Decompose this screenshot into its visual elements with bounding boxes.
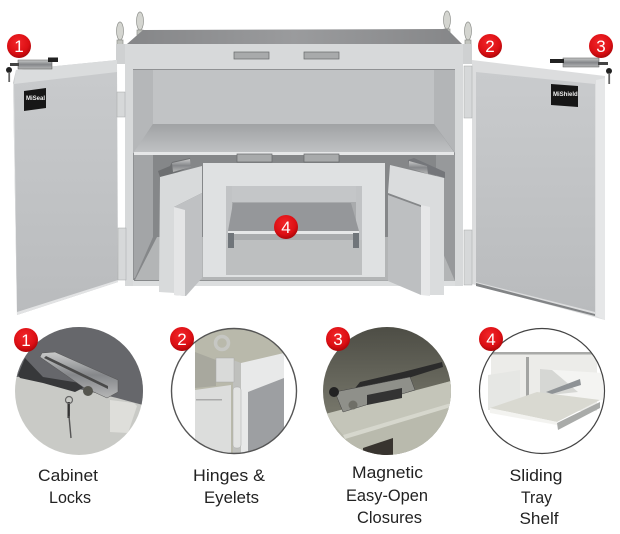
- badge 2 on cabinet: 2: [485, 37, 495, 56]
- door label: [24, 88, 46, 111]
- label: Cabinet Locks: Locks: [49, 488, 91, 507]
- door hinges: [117, 92, 126, 280]
- inner left door: [158, 158, 202, 296]
- label: Hinges & Eyelets: Eyelets: [204, 488, 259, 507]
- middle shelf: [134, 124, 454, 156]
- icon: right door lock: [550, 58, 612, 84]
- label: Magnetic Easy-Open Closures: [346, 463, 428, 527]
- badge 2: 2: [177, 330, 187, 349]
- badge 4 on cabinet: [274, 215, 298, 239]
- inner right door: [388, 158, 445, 296]
- sliding tray: [228, 203, 359, 248]
- label: Cabinet Locks: [38, 466, 98, 507]
- badge 4: [479, 327, 503, 351]
- panel: cabinet locks: [14, 327, 143, 507]
- panel: sliding tray shelf: [479, 327, 605, 528]
- right door: [464, 60, 605, 320]
- panel: magnetic closures: [323, 327, 451, 527]
- label: Magnetic Easy-Open Closures: Magnetic: [352, 463, 424, 482]
- badge 3 on cabinet: 3: [596, 37, 606, 56]
- detail photo: lock: [15, 327, 143, 455]
- circle outline: [480, 328, 604, 454]
- circle outline: [172, 328, 296, 454]
- cabinet illustration: [6, 11, 612, 320]
- badge 4: 4: [486, 330, 496, 349]
- detail photo: tray: [488, 352, 603, 430]
- label: Sliding Tray Shelf: [510, 466, 562, 528]
- badge 3 on cabinet: [589, 34, 613, 58]
- door hinges: [464, 66, 472, 285]
- label: Magnetic Easy-Open Closures: Easy-Open: [346, 486, 428, 505]
- label: Magnetic Easy-Open Closures: Closures: [357, 508, 422, 527]
- label: Sliding Tray Shelf: Tray: [521, 488, 552, 507]
- label: Hinges & Eyelets: [193, 466, 266, 507]
- badge 3: 3: [333, 330, 343, 349]
- badge 1 on cabinet: 1: [14, 37, 24, 56]
- inner safe unit: [203, 163, 385, 277]
- badge 3: [326, 327, 350, 351]
- label: Cabinet Locks: Cabinet: [38, 466, 98, 485]
- detail photo: closure: [323, 327, 451, 455]
- label: Sliding Tray Shelf: Shelf: [520, 509, 559, 528]
- left door: [13, 60, 126, 315]
- icon: left door lock: [6, 58, 58, 82]
- badge 1: [14, 328, 38, 352]
- door label: [551, 84, 578, 107]
- upper compartment: [133, 70, 455, 153]
- label: Hinges & Eyelets: Hinges &: [193, 466, 266, 485]
- badge 2: [170, 327, 194, 351]
- top handles: [234, 52, 339, 162]
- lower compartment: [134, 155, 455, 281]
- cabinet body frame: [116, 44, 472, 286]
- icon: lifting eyelets: [116, 11, 472, 46]
- door label: MiShield: [553, 92, 578, 98]
- detail photo: hinge: [195, 328, 284, 453]
- badge 1 on cabinet: [7, 34, 31, 58]
- badge 4 on cabinet: 4: [281, 218, 291, 237]
- cabinet top surface: [127, 29, 462, 44]
- badge 2 on cabinet: [478, 34, 502, 58]
- badge 1: 1: [21, 331, 31, 350]
- panel: hinges and eyelets: [170, 327, 297, 507]
- label: Sliding Tray Shelf: Sliding: [510, 466, 562, 485]
- door label: MiSeal: [26, 96, 45, 102]
